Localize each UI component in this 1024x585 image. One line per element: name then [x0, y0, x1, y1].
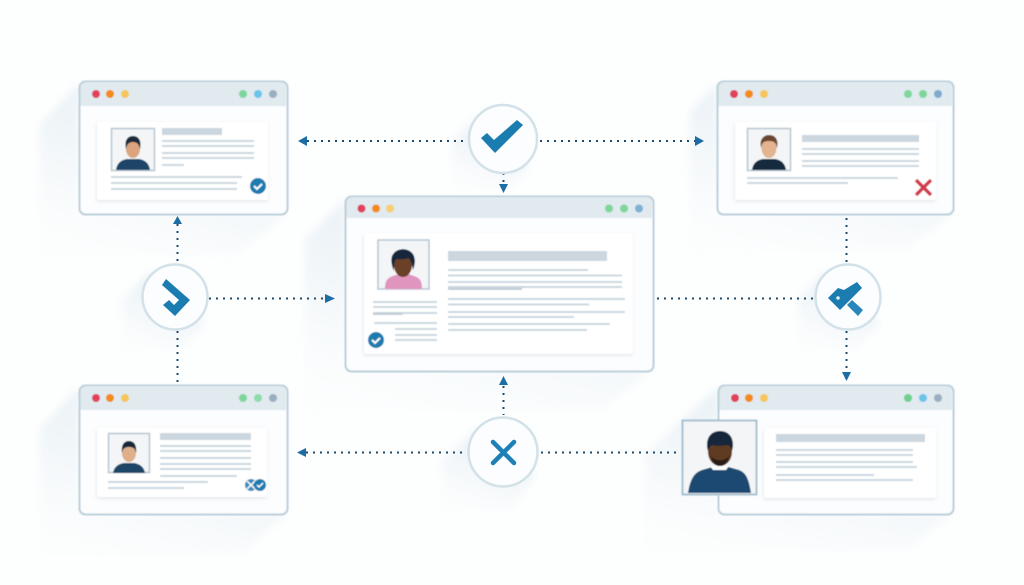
photo: woman in pink top — [378, 240, 429, 289]
arrow: to top-right window — [695, 136, 704, 146]
panel: top-right profile window — [718, 82, 954, 214]
panel: center profile window — [346, 196, 654, 372]
photo: man in black shirt — [748, 128, 790, 170]
photo: man with dark hair in navy jacket — [682, 420, 756, 494]
connectors — [178, 141, 846, 452]
photo: man in navy sweater — [112, 128, 154, 170]
node: reject cross — [468, 418, 538, 486]
panel: bottom-left profile window — [80, 386, 288, 514]
icon: rejected cross — [916, 180, 931, 195]
arrow: down to center window — [499, 184, 508, 193]
panel: bottom-right profile window — [682, 386, 954, 514]
node: approve check — [469, 105, 537, 173]
arrow: right to center window — [325, 294, 335, 303]
arrow: to bottom-left window — [297, 448, 306, 457]
arrow: to top-left window — [298, 136, 307, 146]
photo: man in blue sweater — [108, 434, 150, 473]
arrow: up to top-left window — [173, 216, 182, 224]
icon: verified badge — [250, 178, 266, 194]
panel: top-left profile window — [80, 82, 288, 214]
icon: mixed status badges — [245, 479, 266, 491]
node: mixed check right — [816, 264, 880, 330]
icon: verified badge — [368, 332, 384, 348]
arrow: down to bottom-right window — [842, 372, 851, 381]
long shadows — [40, 84, 952, 555]
arrow: up to center window — [499, 376, 508, 385]
node: partial check left — [142, 264, 208, 330]
